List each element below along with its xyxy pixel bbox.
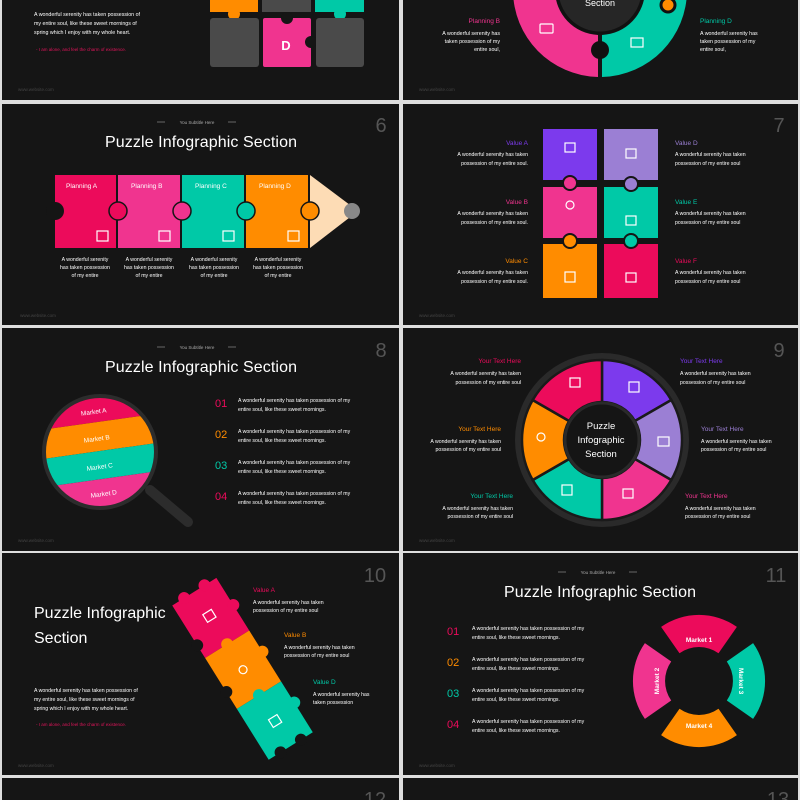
labels: A wonderful serenity has taken: [675, 211, 746, 217]
text block: [18, 12, 141, 92]
labels: possession of my entire soul: [675, 220, 740, 226]
title: Puzzle Infographic: [34, 605, 166, 622]
pieces: Planning B: [131, 183, 162, 190]
list: 04: [215, 491, 227, 503]
heading: You Subtitle Here: [180, 345, 215, 350]
captions: A wonderful serenity: [255, 257, 302, 263]
text block: A wonderful serenity has taken possession of: [34, 12, 141, 18]
heading: You Subtitle Here: [581, 570, 616, 575]
heading: 11: [766, 565, 786, 587]
labels: A wonderful serenity has taken: [680, 371, 751, 377]
labels: A wonderful serenity has taken: [442, 506, 513, 512]
captions: has taken possession: [189, 265, 239, 271]
labels: A wonderful serenity has taken: [457, 152, 528, 158]
labels: A wonderful serenity has taken: [457, 211, 528, 217]
slide 7: value grid: [419, 115, 785, 318]
captions: has taken possession: [60, 265, 110, 271]
labels: A wonderful serenity has taken: [284, 645, 355, 651]
pieces: Planning C: [195, 183, 227, 190]
list: A wonderful serenity has taken possession of my: [472, 688, 585, 694]
captions: of my entire: [200, 273, 228, 279]
labels: possession of my entire soul: [456, 380, 521, 386]
labels: my entire soul, like these sweet mornings of: [34, 697, 135, 703]
list: A wonderful serenity has taken possession of my: [238, 491, 351, 497]
labels: possession of my entire soul: [701, 447, 766, 453]
slide 8: magnifier: [18, 340, 387, 543]
heading: [105, 340, 387, 376]
ring: Infographic: [577, 435, 625, 446]
captions: [20, 257, 303, 318]
slide 6: pencil puzzle: [20, 115, 387, 318]
labels: possession of my entire soul: [253, 608, 318, 614]
labels: A wonderful serenity has taken: [450, 371, 521, 377]
list: A wonderful serenity has taken possession of my: [238, 429, 351, 435]
captions: of my entire: [264, 273, 292, 279]
list: entire soul, like these sweet mornings.: [238, 407, 326, 413]
ring: Puzzle: [587, 421, 615, 432]
heading: 6: [375, 115, 387, 137]
captions: A wonderful serenity: [62, 257, 109, 263]
list: 01: [215, 398, 227, 410]
captions: has taken possession: [124, 265, 174, 271]
labels: A wonderful serenity has: [700, 31, 758, 37]
magnifier: Market C: [86, 462, 114, 473]
labels: possession of my entire soul: [675, 161, 740, 167]
ring: [633, 615, 765, 747]
pieces: Planning D: [259, 183, 291, 190]
labels: Value B: [284, 632, 306, 639]
captions: of my entire: [71, 273, 99, 279]
labels: taken possession of my: [700, 39, 756, 45]
labels: Your Text Here: [680, 358, 723, 365]
labels: Value D: [675, 140, 698, 147]
captions: A wonderful serenity: [191, 257, 238, 263]
labels: Your Text Here: [478, 358, 521, 365]
labels: Your Text Here: [685, 493, 728, 500]
magnifier: [42, 394, 193, 527]
list: 02: [447, 657, 459, 669]
magnifier: Market A: [81, 407, 108, 418]
list: A wonderful serenity has taken possession of my: [472, 626, 585, 632]
magnifier: Market D: [90, 489, 118, 500]
labels: [419, 140, 746, 318]
heading: Puzzle Infographic Section: [504, 584, 696, 601]
labels: A wonderful serenity has taken: [685, 506, 756, 512]
labels: Value D: [313, 679, 336, 686]
pieces: [46, 175, 360, 248]
ring: Market 3: [737, 668, 744, 695]
list: 03: [215, 460, 227, 472]
labels: [419, 358, 772, 543]
list: A wonderful serenity has taken possession of my: [472, 719, 585, 725]
puzzle grid: [210, 0, 364, 67]
labels: taken possession of my: [445, 39, 500, 45]
list: entire soul, like these sweet mornings.: [472, 666, 560, 672]
slide 5a: text and puzzle grid: [18, 0, 364, 92]
labels: A wonderful serenity has taken: [457, 270, 528, 276]
title: [34, 605, 166, 647]
labels: A wonderful serenity has: [442, 31, 500, 37]
list: entire soul, like these sweet mornings.: [238, 469, 326, 475]
slide 5b: half ring: [419, 0, 758, 92]
ring: Section: [585, 449, 617, 460]
list: 01: [447, 626, 459, 638]
labels: Value E: [675, 199, 698, 206]
title: Section: [34, 630, 87, 647]
slide 11: market ring: [419, 565, 786, 768]
puzzle grid: D: [281, 38, 291, 53]
ring: Market 2: [654, 667, 661, 694]
labels: [18, 587, 370, 768]
labels: possession of my entire soul: [680, 380, 745, 386]
labels: Your Text Here: [458, 426, 501, 433]
list: www.website.com: [419, 763, 455, 768]
text block: www.website.com: [18, 87, 54, 92]
text block: - I am alone, and feel the charm of existence.: [36, 47, 126, 52]
labels: possession of my entire soul.: [461, 279, 528, 285]
captions: has taken possession: [253, 265, 303, 271]
list: entire soul, like these sweet mornings.: [472, 635, 560, 641]
list: A wonderful serenity has taken possession of my: [472, 657, 585, 663]
slide 7: value grid: 7: [773, 115, 785, 137]
list: 02: [215, 429, 227, 441]
grid pieces: [543, 129, 658, 298]
heading: Puzzle Infographic Section: [105, 134, 297, 151]
labels: Planning B: [469, 18, 500, 25]
labels: - I am alone, and feel the charm of existence.: [36, 722, 126, 727]
labels: possession of my entire soul: [675, 279, 740, 285]
slide 10: diagonal puzzle: 10: [364, 565, 386, 587]
heading: [105, 115, 387, 151]
labels: possession of my entire soul: [448, 514, 513, 520]
list: [419, 626, 585, 768]
labels: Value C: [505, 258, 528, 265]
labels: www.website.com: [18, 763, 54, 768]
ring: Market 1: [686, 637, 713, 644]
captions: of my entire: [135, 273, 163, 279]
captions: www.website.com: [20, 313, 56, 318]
magnifier: Market B: [83, 434, 110, 445]
labels: possession of my entire soul.: [461, 161, 528, 167]
heading: [504, 565, 786, 601]
labels: entire soul,: [474, 47, 500, 53]
labels: A wonderful serenity has taken: [430, 439, 501, 445]
list: www.website.com: [18, 538, 54, 543]
labels: A wonderful serenity has: [313, 692, 370, 698]
slide 9: puzzle ring: [419, 340, 785, 543]
labels: www.website.com: [419, 87, 455, 92]
labels: entire soul,: [700, 47, 726, 53]
list: A wonderful serenity has taken possession of my: [238, 398, 351, 404]
list: entire soul, like these sweet mornings.: [472, 728, 560, 734]
labels: Planning D: [700, 18, 732, 25]
labels: possession of my entire soul: [685, 514, 750, 520]
list: 03: [447, 688, 459, 700]
labels: Value A: [253, 587, 276, 594]
strip: [164, 570, 321, 768]
heading: You Subtitle Here: [180, 120, 215, 125]
labels: possession of my entire soul: [284, 653, 349, 659]
labels: Value F: [675, 258, 697, 265]
labels: A wonderful serenity has taken: [675, 152, 746, 158]
slide numbers 12 and 13: [364, 789, 789, 800]
labels: Your Text Here: [701, 426, 744, 433]
labels: A wonderful serenity has taken: [253, 600, 324, 606]
heading: 8: [375, 340, 387, 362]
labels: Value B: [506, 199, 528, 206]
list: entire soul, like these sweet mornings.: [238, 438, 326, 444]
labels: possession of my entire soul: [436, 447, 501, 453]
labels: Your Text Here: [470, 493, 513, 500]
ring: Market 4: [686, 723, 713, 730]
captions: A wonderful serenity: [126, 257, 173, 263]
list: entire soul, like these sweet mornings.: [472, 697, 560, 703]
pieces: Planning A: [66, 183, 98, 190]
labels: A wonderful serenity has taken: [675, 270, 746, 276]
labels: taken possession: [313, 700, 353, 706]
labels: A wonderful serenity has taken possession of: [34, 688, 138, 694]
text block: spring which I enjoy with my whole heart.: [34, 30, 130, 36]
list: 04: [447, 719, 459, 731]
list: entire soul, like these sweet mornings.: [238, 500, 326, 506]
labels: www.website.com: [419, 538, 455, 543]
labels: Value A: [506, 140, 529, 147]
text block: my entire soul, like these sweet mornings of: [34, 21, 137, 27]
heading: Puzzle Infographic Section: [105, 359, 297, 376]
slide 10: diagonal puzzle: [18, 565, 386, 768]
labels: A wonderful serenity has taken: [701, 439, 772, 445]
labels: [419, 18, 758, 92]
labels: www.website.com: [419, 313, 455, 318]
labels: spring which I enjoy with my whole heart.: [34, 706, 128, 712]
ring: [513, 0, 687, 77]
labels: possession of my entire soul.: [461, 220, 528, 226]
list: [18, 398, 351, 543]
list: A wonderful serenity has taken possession of my: [238, 460, 351, 466]
slide 9: puzzle ring: 9: [773, 340, 785, 362]
ring: [515, 353, 689, 527]
